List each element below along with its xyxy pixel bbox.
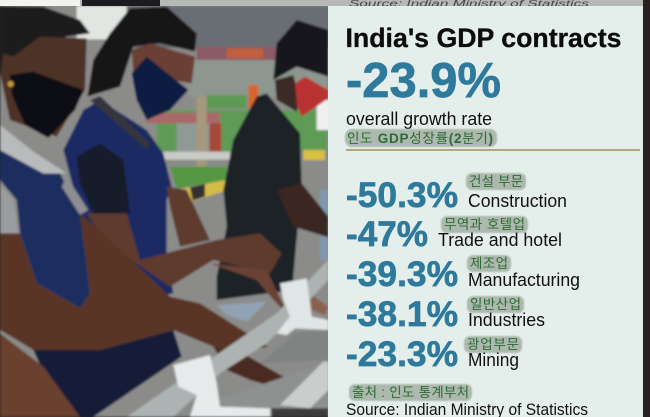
row: construction <box>346 173 567 215</box>
photo: workers in masks washing hands at outdoor taps <box>0 0 330 417</box>
row: construction: 건설 부문 <box>469 174 523 189</box>
title: India's GDP contracts <box>346 23 622 53</box>
row: mining: -23.3% <box>346 334 458 374</box>
person: woman in the middle with navy mask <box>63 7 328 315</box>
person: woman in the foreground with black mask <box>0 6 295 417</box>
wash station: gray basin and white taps <box>127 260 328 417</box>
row: industries: -38.1% <box>346 294 458 334</box>
row: manufacturing: -39.3% <box>346 254 458 294</box>
row: construction: Construction <box>468 191 567 211</box>
headline figure: overall growth rate <box>346 108 492 129</box>
row: mining: 광업부문 <box>467 337 519 352</box>
headline figure: 인도 GDP성장률(2분기) <box>347 131 493 146</box>
row: trade and hotel: 무역과 호텔업 <box>444 217 525 232</box>
person: man in the background with red mask <box>217 20 328 322</box>
source: 출처 : 인도 통계부처 <box>352 385 469 400</box>
row: construction: -50.3% <box>346 175 458 215</box>
row: manufacturing: Manufacturing <box>468 270 580 290</box>
row: industries: Industries <box>468 310 545 330</box>
row: trade and hotel: -47% <box>346 214 428 254</box>
headline figure <box>345 54 501 147</box>
row: mining: Mining <box>468 350 519 370</box>
panel: GDP statistics <box>328 6 643 417</box>
row: trade and hotel <box>346 214 562 254</box>
right edge strip of photo <box>643 0 650 417</box>
row: industries: 일반산업 <box>470 297 521 312</box>
top strip: cropped edge of the image above <box>0 0 650 8</box>
row: manufacturing <box>346 254 580 294</box>
row: mining <box>346 334 522 374</box>
row: industries <box>346 294 545 334</box>
headline figure: -23.9% <box>346 54 501 108</box>
row: manufacturing: 제조업 <box>470 256 508 271</box>
row: trade and hotel: Trade and hotel <box>438 230 562 250</box>
source <box>346 384 588 417</box>
